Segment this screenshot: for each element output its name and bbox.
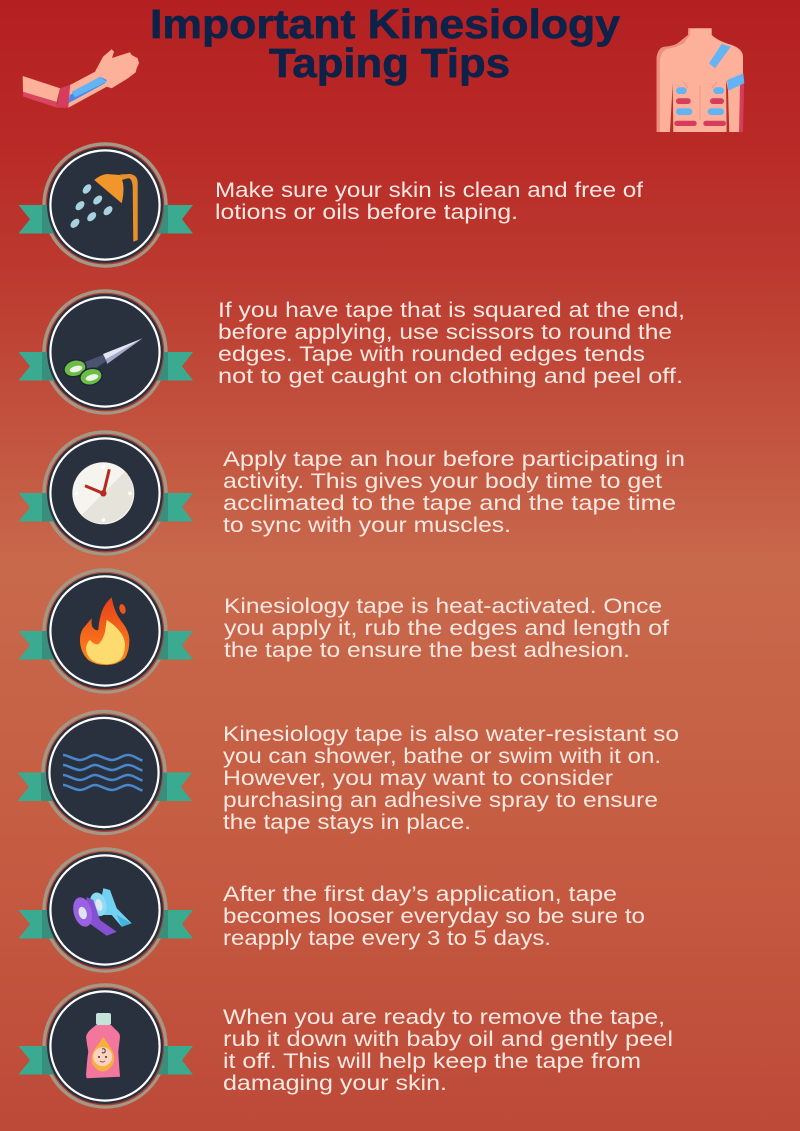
tip 6 text: becomes looser everyday so be sure to xyxy=(223,905,645,928)
tip 6 text xyxy=(223,883,645,950)
tip 7 text: damaging your skin. xyxy=(223,1072,447,1095)
tip 1 text: Make sure your skin is clean and free of xyxy=(215,179,643,202)
tip 3 text xyxy=(223,448,685,537)
badge: tape rolls xyxy=(18,849,193,971)
tip 4 text: Kinesiology tape is heat-activated. Once xyxy=(224,595,662,618)
badge: flame xyxy=(18,570,193,692)
tip 3 text: acclimated to the tape and the tape time xyxy=(223,492,676,515)
tip 7 text: rub it down with baby oil and gently peel xyxy=(223,1028,673,1051)
tip 1 text: lotions or oils before taping. xyxy=(215,201,518,224)
badge: water waves xyxy=(18,712,192,834)
tip 2 text: edges. Tape with rounded edges tends xyxy=(218,343,645,366)
tip 3 text: activity. This gives your body time to get xyxy=(223,470,662,493)
tip 5 text: the tape stays in place. xyxy=(223,811,471,834)
tip 7 text: When you are ready to remove the tape, xyxy=(223,1006,665,1029)
tip 2 text: not to get caught on clothing and peel off. xyxy=(218,365,683,388)
tip 3 text: Apply tape an hour before participating in xyxy=(223,448,685,471)
icon: scissors xyxy=(61,338,143,388)
tip 4 text: you apply it, rub the edges and length of xyxy=(224,617,669,640)
icon: shower head xyxy=(69,174,138,242)
tip 5 text: purchasing an adhesive spray to ensure xyxy=(223,789,658,812)
tip 4 text xyxy=(224,595,669,662)
tip 6 text: After the first day’s application, tape xyxy=(223,883,617,906)
title xyxy=(150,1,620,86)
tip 5 text: you can shower, bathe or swim with it on. xyxy=(223,745,661,768)
icon: taped back xyxy=(657,28,744,132)
icon: bottle xyxy=(86,1013,120,1078)
tip 5 text: However, you may want to consider xyxy=(223,767,613,790)
tip 2 text: before applying, use scissors to round the xyxy=(218,321,672,344)
tip 5 text xyxy=(223,723,679,834)
tip 1 text xyxy=(215,179,643,224)
tip 2 text xyxy=(218,299,685,388)
tip 6 text: reapply tape every 3 to 5 days. xyxy=(223,927,551,950)
badge: scissors xyxy=(18,291,193,413)
icon: tape rolls xyxy=(70,888,132,936)
icon: taped arm xyxy=(23,49,139,108)
badge: shower xyxy=(18,144,193,266)
title: Taping Tips xyxy=(269,40,510,86)
tip 4 text: the tape to ensure the best adhesion. xyxy=(224,639,630,662)
badge: clock xyxy=(18,432,193,554)
title: Important Kinesiology xyxy=(150,1,620,47)
icon: clock xyxy=(72,462,134,524)
icon: waves xyxy=(63,755,142,790)
tip 5 text: Kinesiology tape is also water-resistant so xyxy=(223,723,679,746)
tip 2 text: If you have tape that is squared at the end, xyxy=(218,299,685,322)
tip 7 text: it off. This will help keep the tape from xyxy=(223,1050,641,1073)
tip 7 text xyxy=(223,1006,673,1095)
tip 3 text: to sync with your muscles. xyxy=(223,514,511,537)
badge: baby oil bottle xyxy=(18,985,193,1107)
icon: flame xyxy=(80,597,129,665)
